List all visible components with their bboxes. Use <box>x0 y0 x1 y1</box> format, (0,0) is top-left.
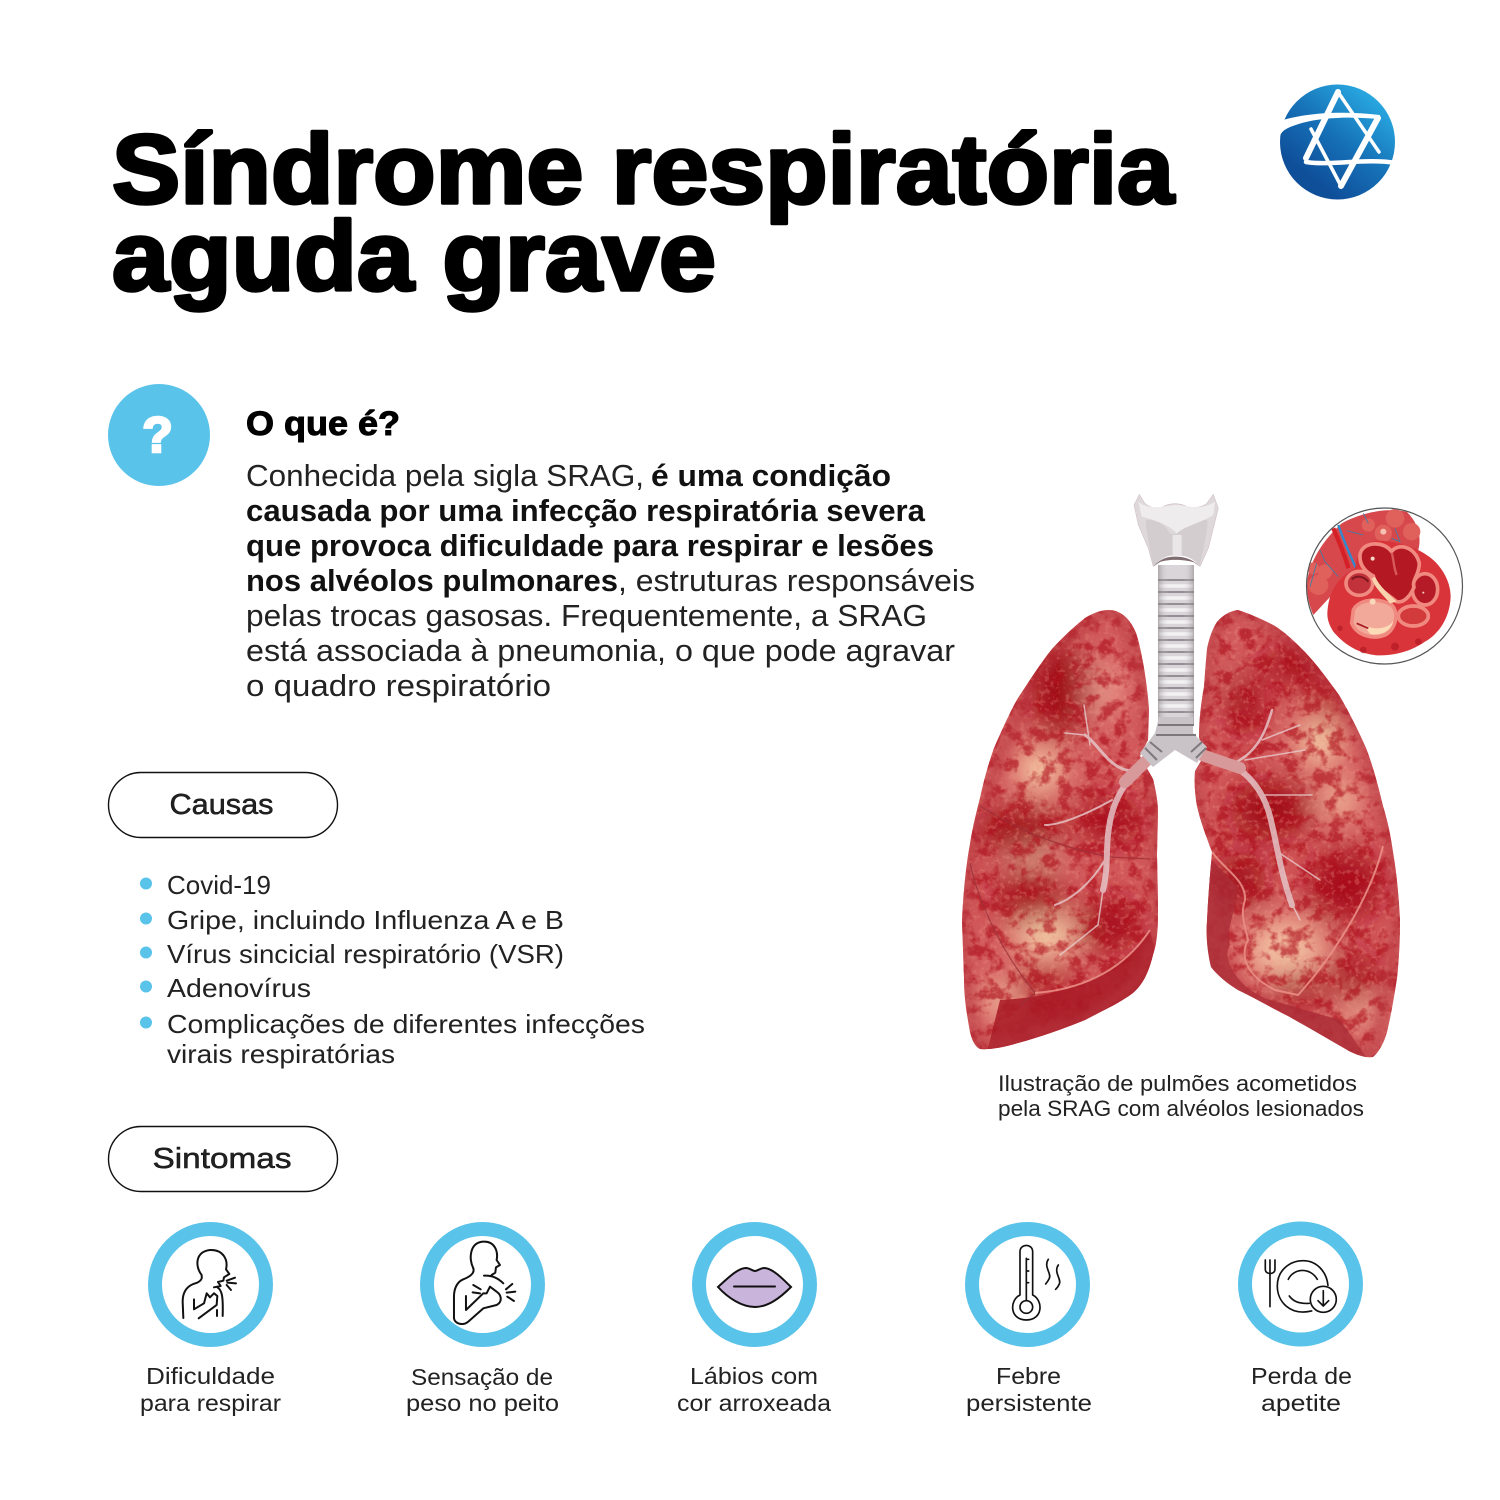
what is it paragraph: o quadro respiratório <box>246 668 551 703</box>
icon: chest weight <box>427 1229 538 1340</box>
what is it paragraph: é uma condição <box>651 458 891 493</box>
icon: thermometer <box>972 1229 1083 1340</box>
causes list <box>140 870 645 1069</box>
icon: purple lips <box>699 1229 810 1340</box>
bronchi <box>1045 705 1320 955</box>
symptom label <box>1251 1363 1352 1416</box>
causes list: Gripe, incluindo Influenza A e B <box>167 905 564 935</box>
symptom label: Lábios com <box>690 1363 818 1389</box>
symptom label: Sensação de <box>411 1364 553 1390</box>
what is it paragraph: está associada à pneumonia, o que pode agravar <box>246 633 955 668</box>
what is it paragraph: que provoca dificuldade para respirar e lesões <box>246 528 934 563</box>
panel: causes heading <box>108 772 338 838</box>
what is it paragraph: Conhecida pela sigla SRAG, <box>246 458 644 493</box>
causes list: Vírus sincicial respiratório (VSR) <box>167 939 564 969</box>
title: aguda grave <box>112 201 716 311</box>
logo <box>1277 84 1396 200</box>
symptom label: Febre <box>996 1363 1061 1389</box>
symptom label: Dificuldade <box>146 1363 275 1389</box>
panel: symptoms heading: Sintomas <box>152 1143 292 1175</box>
lung caption: pela SRAG com alvéolos lesionados <box>998 1096 1364 1121</box>
icon: question mark: ? <box>142 407 173 463</box>
title: Síndrome respiratória <box>112 114 1176 224</box>
symptom label <box>406 1364 559 1416</box>
lungs illustration <box>950 494 1410 1070</box>
symptom label: Perda de <box>1251 1363 1352 1389</box>
title <box>112 114 1176 311</box>
what is it paragraph: pelas trocas gasosas. Frequentemente, a SRAG <box>246 598 927 633</box>
symptom label: cor arroxeada <box>677 1390 831 1416</box>
causes list: virais respiratórias <box>167 1039 395 1069</box>
what is it paragraph: , estruturas responsáveis <box>618 563 975 598</box>
symptom label <box>966 1363 1092 1416</box>
symptom label: apetite <box>1261 1390 1341 1416</box>
inset: alveoli <box>1303 507 1463 667</box>
icon: breathing difficulty <box>155 1229 266 1340</box>
what is it paragraph: causada por uma infecção respiratória severa <box>246 493 926 528</box>
what is it paragraph <box>246 458 975 703</box>
trachea <box>1125 494 1240 782</box>
causes list: Complicações de diferentes infecções <box>167 1009 645 1039</box>
causes list: Adenovírus <box>167 973 311 1003</box>
what is it heading: O que é? <box>246 405 400 443</box>
what is it paragraph: nos alvéolos pulmonares <box>246 563 618 598</box>
causes list: Covid-19 <box>167 870 271 900</box>
symptom label: persistente <box>966 1390 1092 1416</box>
symptom label: para respirar <box>140 1390 281 1416</box>
lung caption <box>998 1071 1364 1121</box>
icon: question mark <box>108 384 210 486</box>
panel: symptoms heading <box>108 1126 338 1192</box>
symptom label <box>677 1363 831 1416</box>
panel: causes heading: Causas <box>170 789 274 821</box>
lung caption: Ilustração de pulmões acometidos <box>998 1071 1357 1096</box>
symptom label: peso no peito <box>406 1390 559 1416</box>
icon: plate and fork <box>1245 1228 1356 1340</box>
symptom label <box>140 1363 281 1416</box>
